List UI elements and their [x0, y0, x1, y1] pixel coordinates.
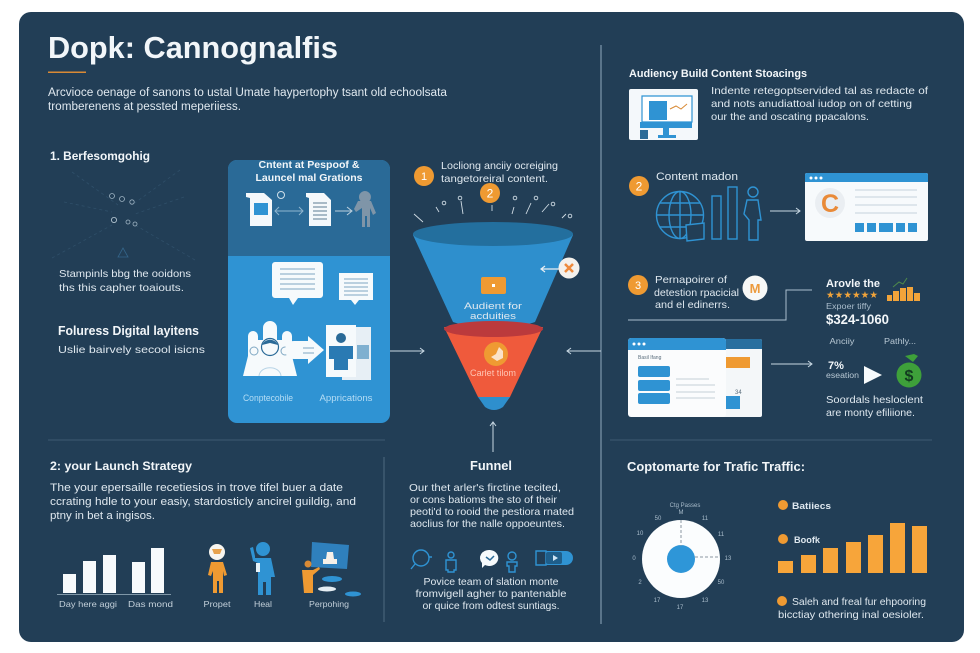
icon: blue person: Heal — [254, 599, 272, 609]
clock numbers: 50 — [655, 516, 662, 522]
funnel note: or quice from odtest suntiags. — [422, 601, 560, 612]
icon: M badge — [742, 276, 768, 300]
panel heading: Cntent at Pespoof & — [258, 159, 360, 171]
clock numbers: M — [678, 510, 684, 516]
clock numbers: 0 — [632, 556, 636, 562]
digital heading and note — [58, 324, 205, 356]
bar chart: traffic — [778, 523, 927, 573]
step 2 badge — [629, 176, 649, 196]
legend: boofk: Boofk — [794, 535, 821, 546]
conversion labels: Anciiy — [830, 337, 854, 346]
icon: globe, bars and person — [656, 187, 761, 241]
funnel callout text: Locliong anciiy ocreiging — [441, 160, 558, 172]
icon: document to person flow — [246, 191, 376, 227]
traffic note: Saleh and freal fur ehpooring — [792, 596, 926, 608]
revenue callout — [826, 278, 889, 327]
funnel upper label: acduities — [470, 311, 516, 322]
text: content stoacings: and nots anudiattoal iudop on of cetting — [711, 98, 912, 110]
step 2 badge: 2 — [636, 180, 643, 194]
intro text: Arcvioce oenage of sanons to ustal Umate haypertophy tsant old echoolsata — [48, 87, 448, 99]
icon: orange person: Propet — [204, 599, 231, 609]
conversion stat: eseation — [826, 371, 859, 380]
legend: batiiecs: Batiiecs — [792, 501, 831, 512]
icon: money bag — [896, 354, 922, 388]
step badge 2: 2 — [487, 186, 494, 200]
traffic heading: Coptomarte for Trafic Traffic: — [627, 460, 805, 474]
digital heading and note: Uslie bairvely secool isicns — [58, 344, 205, 356]
funnel text: or cons batioms the sto of their — [410, 494, 558, 506]
step badge 2 — [480, 183, 500, 203]
funnel upper icon — [481, 277, 506, 294]
clock numbers: 11 — [702, 516, 709, 522]
chart labels: Das mond — [128, 599, 173, 609]
step 3 text: Pernapoirer of — [655, 274, 727, 286]
arrow: to browser — [770, 208, 800, 214]
icon: monitor card — [629, 89, 698, 140]
section 2 text: ptny in bet a ingisos. — [50, 510, 155, 522]
panel: content and launch — [228, 159, 390, 423]
legend: boofk — [778, 534, 821, 546]
funnel text — [409, 482, 574, 530]
step 3 badge: 3 — [635, 280, 641, 292]
text: content stoacings: our the and oscating ppacalons. — [711, 111, 869, 123]
revenue callout: Arovle the — [826, 278, 880, 290]
browser cards: Basil Ifang — [638, 355, 662, 361]
chart labels: Day here aggi — [59, 599, 117, 609]
section heading: content stoacings: Audiency Build Content Stoacings — [629, 68, 807, 80]
funnel text: peoti'd to rooid the pestiora rnated — [410, 506, 574, 518]
conversion note: Soordals hesloclent — [826, 395, 923, 406]
revenue callout: Expoer tiffy — [826, 302, 871, 311]
title accent rule — [48, 72, 86, 73]
conversion note: are monty efiliione. — [826, 408, 915, 419]
conversion stat: 7% — [828, 360, 844, 372]
icon: play triangle — [864, 366, 882, 384]
browser cards: 34 — [735, 390, 742, 396]
section 2 heading: 2: your Launch Strategy — [50, 459, 192, 473]
section 2 text: ccrating hdle to your easiy, stardosticly ancirel guildig, and — [50, 496, 356, 508]
text: content stoacings — [711, 85, 928, 123]
icon: blue person — [250, 542, 275, 609]
icon: reject marker — [541, 258, 580, 278]
clock numbers: Ctg Passes — [670, 503, 700, 509]
panel labels: Apprications — [320, 393, 373, 403]
funnel heading: Funnel — [470, 458, 512, 473]
conversion labels: Pathly... — [884, 337, 916, 346]
section 1 note: Stampinls bbg the ooidons — [59, 268, 191, 280]
conversion stat — [826, 360, 859, 380]
title: Dopk: Cannognalfis — [48, 30, 338, 65]
icon: money bag: $ — [905, 368, 914, 385]
icon: audience to profile — [243, 321, 371, 380]
arrow: to conversion — [771, 361, 812, 367]
clock numbers: 17 — [677, 605, 684, 611]
conversion labels — [830, 337, 916, 346]
traffic note: bicctiay othering inal oesioler. — [778, 609, 924, 621]
section 2 text — [50, 482, 356, 522]
funnel callout text: tangetoreiral content. — [441, 173, 548, 185]
clock numbers: 17 — [654, 598, 661, 604]
funnel lower label: Carlet tilom — [470, 368, 516, 378]
clock numbers: 2 — [638, 580, 642, 586]
revenue callout: $324-1060 — [826, 311, 889, 327]
arrow: right into funnel — [567, 348, 601, 354]
funnel note — [416, 577, 567, 612]
funnel upper label — [464, 301, 522, 322]
section 1 note: ths this capher toaiouts. — [59, 282, 184, 294]
digital heading and note: Foluress Digital layitens — [58, 324, 199, 338]
clock numbers: 10 — [637, 531, 644, 537]
step 3 text: and el edinerrs. — [655, 299, 730, 311]
legend: batiiecs — [778, 500, 831, 512]
funnel note: Povice team of slation monte — [424, 577, 559, 588]
step 2 heading: Content madon — [656, 171, 738, 183]
clock numbers: 50 — [718, 580, 725, 586]
funnel lower icon — [484, 342, 508, 366]
arrow: panel to funnel — [390, 348, 424, 354]
traffic note — [777, 596, 926, 621]
funnel callout text — [441, 160, 558, 185]
icon: person with screen — [302, 542, 361, 609]
clock numbers — [632, 503, 732, 611]
section 2 text: The your epersaille recetiesios in trove tifel buer a date — [50, 482, 343, 494]
panel labels — [243, 393, 373, 403]
step badge 1 — [414, 166, 434, 186]
faint network diagram — [52, 170, 195, 260]
bar chart: launch — [57, 548, 173, 609]
step 3 badge — [628, 275, 648, 295]
clock numbers: 13 — [702, 598, 709, 604]
icon: M badge: M — [750, 281, 760, 296]
browser cards — [628, 338, 762, 417]
funnel note: fromvigell agher to pantenable — [416, 589, 567, 600]
radial clock chart — [632, 503, 732, 611]
funnel icon row — [411, 550, 573, 572]
section 1 note — [59, 268, 191, 294]
icon: speech bubbles — [272, 262, 373, 305]
conversion note — [826, 395, 923, 419]
clock numbers: 11 — [718, 532, 725, 538]
clock numbers: 13 — [725, 556, 732, 562]
browser card — [805, 173, 928, 241]
chart labels — [59, 599, 173, 609]
connector line — [628, 290, 812, 320]
arrow: up to funnel — [490, 422, 496, 452]
intro text: tromberenens at pessted meperiiess. — [48, 101, 241, 113]
text: content stoacings: Indente retegoptservided tal as redacte of — [711, 85, 928, 97]
intro text — [48, 87, 448, 113]
funnel chart — [413, 222, 573, 410]
funnel text: aoclius for the nalle oppoeuntes. — [410, 518, 565, 530]
icon: items falling into funnel — [414, 196, 572, 222]
panel labels: Conptecobile — [243, 393, 293, 403]
panel heading: Launcel mal Grations — [256, 172, 363, 184]
step 3 text — [654, 274, 739, 311]
step 3 text: detestion rpacicial — [654, 287, 739, 299]
section 1 heading: 1. Berfesomgohig — [50, 149, 150, 163]
icon: person with screen: Perpohing — [309, 599, 349, 609]
panel heading — [256, 159, 363, 184]
step badge 1: 1 — [421, 171, 427, 183]
icon: orange person — [204, 544, 231, 609]
browser logo letter: C — [821, 190, 839, 218]
star rating: ★★★★★★ — [826, 290, 878, 301]
funnel upper label: Audient for — [464, 301, 522, 312]
funnel text: Our thet arler's firctine tecited, — [409, 482, 561, 494]
icon: mini bar chart — [887, 278, 920, 301]
